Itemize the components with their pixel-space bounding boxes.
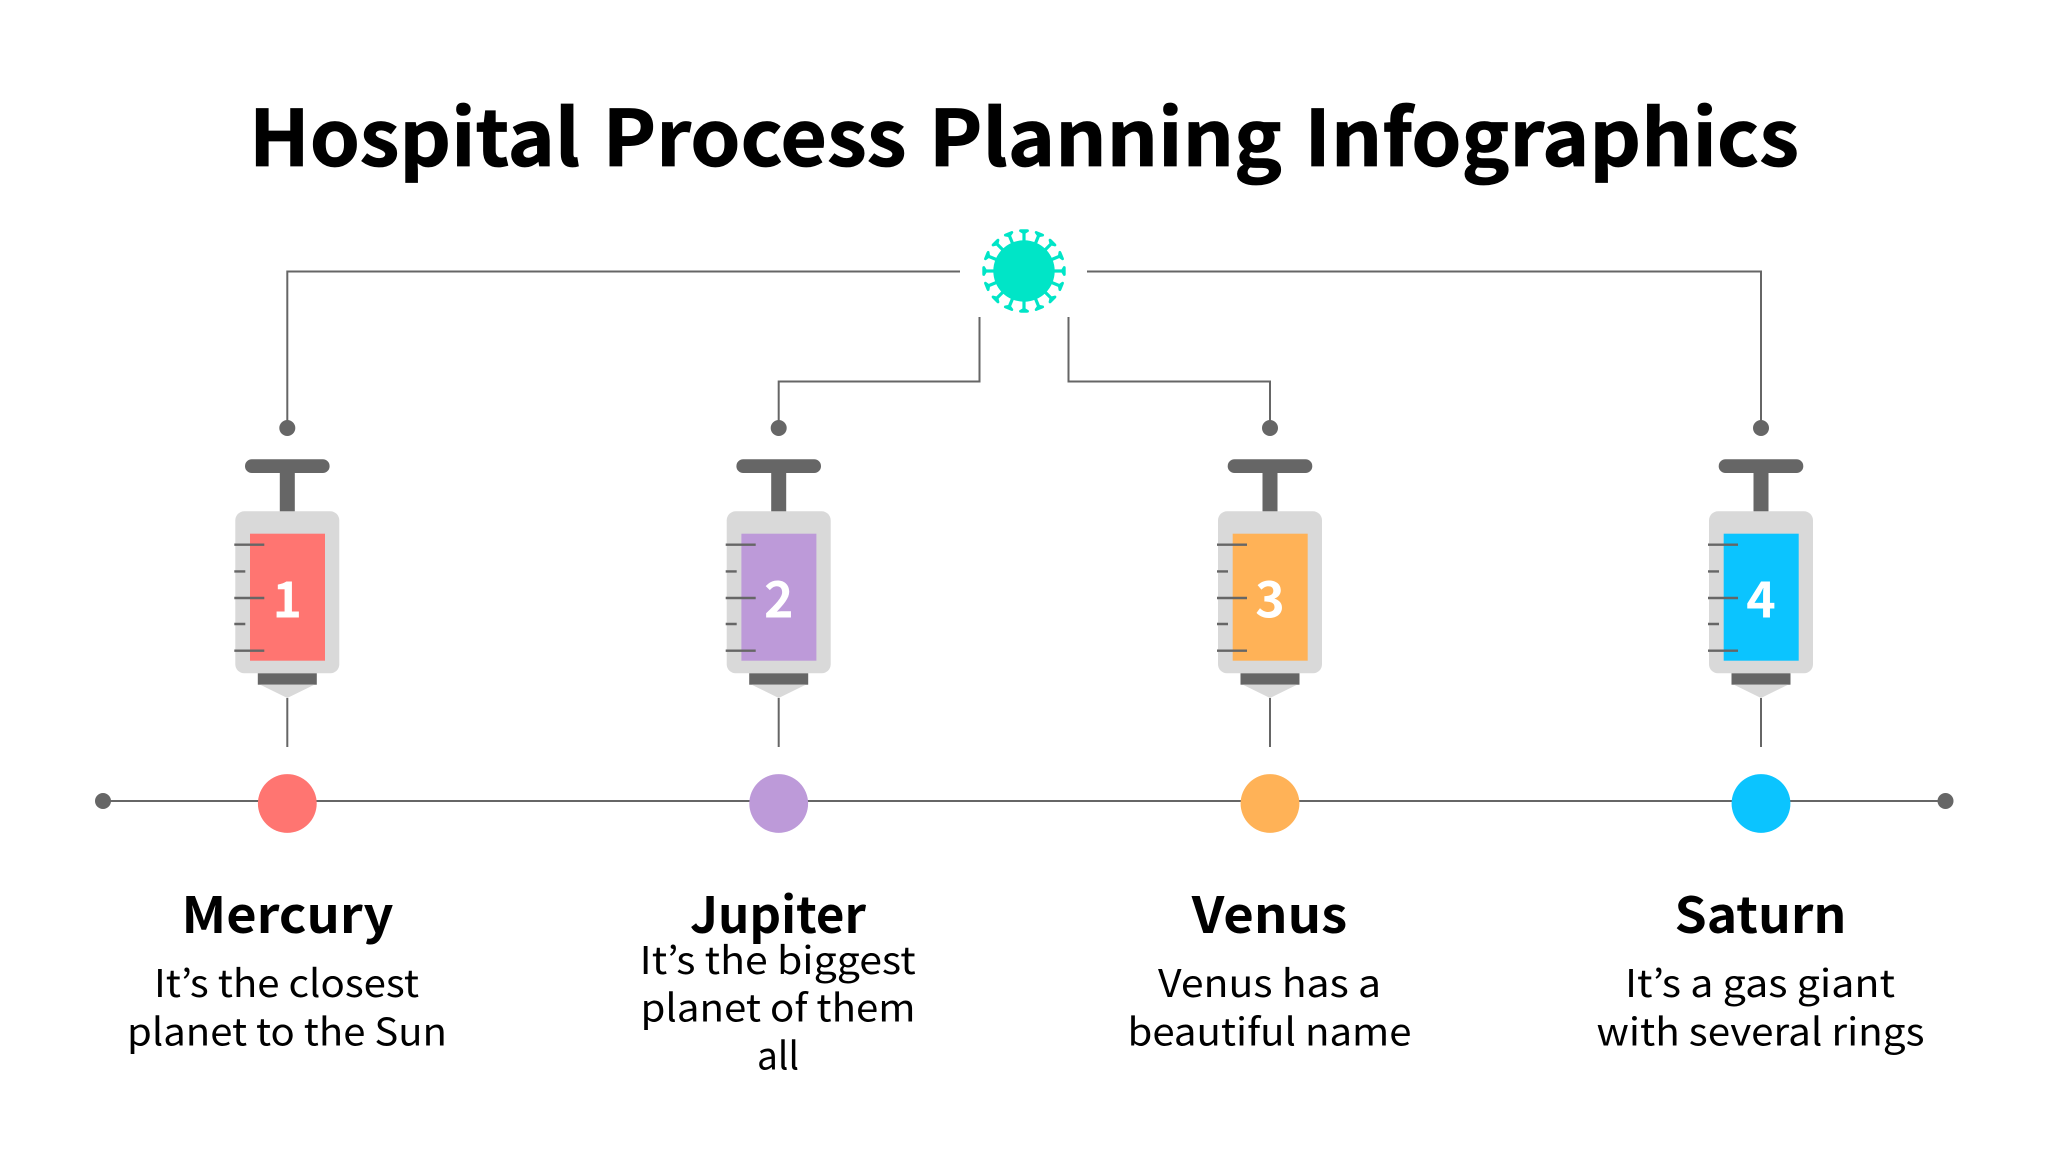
timeline marker 2: [749, 774, 808, 833]
text block: Saturn: It’s a gas giant: [1625, 953, 1895, 1008]
title: Hospital Process Planning Infographics: [249, 77, 1799, 189]
text block: Jupiter: [640, 876, 916, 1080]
text block: Mercury: Mercury: [182, 876, 394, 948]
number 1: 1: [273, 560, 302, 632]
text block: Jupiter: all: [757, 1025, 799, 1080]
timeline: [95, 793, 1954, 809]
number 4: 4: [1746, 560, 1776, 632]
timeline marker 3: [1241, 774, 1299, 833]
text block: Saturn: [1596, 876, 1924, 1056]
number 2: 2: [764, 560, 793, 632]
syringe 1: [234, 420, 339, 747]
text block: Jupiter: planet of them: [640, 978, 916, 1033]
syringe 4: [1708, 420, 1813, 747]
text block: Venus: beautiful name: [1128, 1002, 1412, 1056]
number 3: 3: [1255, 560, 1285, 632]
text block: Venus: [1128, 876, 1412, 1056]
text block: Mercury: It’s the closest: [154, 953, 419, 1008]
icon: virus: [982, 229, 1066, 313]
syringe 2: [726, 420, 831, 747]
syringe 3: [1217, 420, 1322, 747]
connectors from virus to syringes: [287, 272, 1761, 428]
text block: Venus: Venus has a: [1158, 953, 1381, 1008]
text block: Jupiter: Jupiter: [690, 876, 866, 948]
text block: Mercury: planet to the Sun: [127, 1002, 447, 1056]
text block: Jupiter: It’s the biggest: [640, 930, 916, 985]
timeline marker 1: [258, 774, 317, 833]
text block: Saturn: Saturn: [1674, 876, 1846, 948]
text block: Venus: Venus: [1191, 876, 1347, 948]
text block: Saturn: with several rings: [1596, 1002, 1924, 1056]
text block: Mercury: [127, 876, 447, 1056]
timeline marker 4: [1732, 774, 1790, 833]
